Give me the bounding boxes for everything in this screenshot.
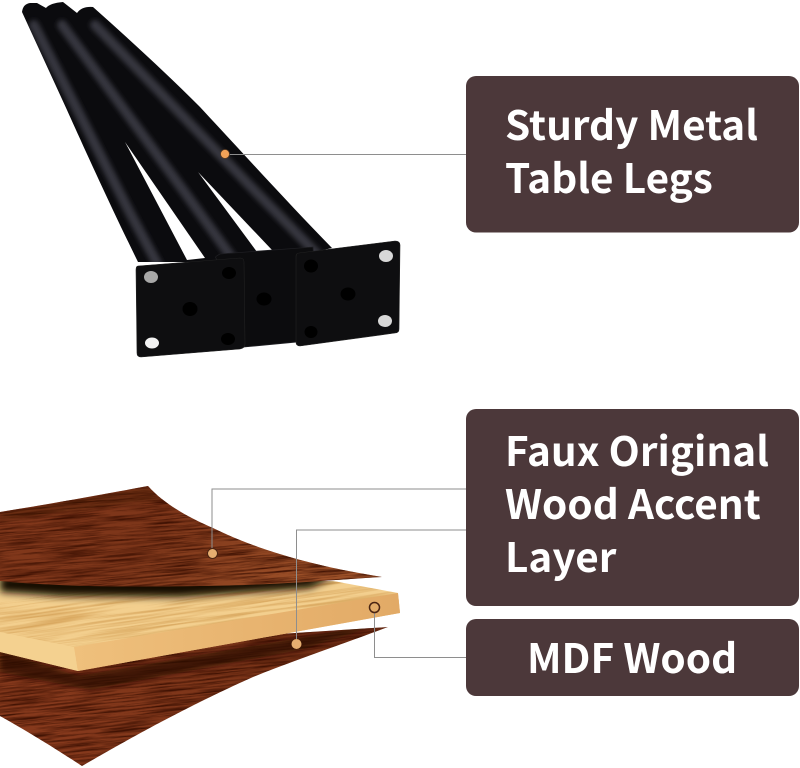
- legs: three tapered black tubes: [22, 2, 332, 265]
- mounting plate: left: [136, 258, 245, 357]
- light MDF board: [0, 581, 400, 671]
- label panel: sturdy metal table legs: [466, 76, 799, 232]
- bottom veneer layer: [0, 627, 388, 766]
- photo: layered wood board: [0, 486, 400, 766]
- label text: Faux Original: [505, 419, 769, 478]
- label panel: faux original wood accent layer: [466, 409, 799, 606]
- label text: Sturdy Metal: [505, 93, 758, 152]
- top veneer layer: [0, 486, 382, 586]
- leader line and dot: accent layer (upper): [208, 489, 466, 558]
- label text: MDF Wood: [527, 626, 737, 685]
- leader line and dot: accent layer (lower): [292, 530, 466, 649]
- mounting plate: middle: [216, 247, 318, 347]
- label text: Wood Accent: [505, 472, 761, 531]
- photo: black metal table legs: [22, 2, 400, 357]
- mounting plate: right: [296, 241, 400, 346]
- leader line and dot: metal legs: [220, 150, 466, 158]
- label panel: MDF wood: [466, 619, 799, 696]
- label text: Table Legs: [505, 146, 713, 205]
- label text: Layer: [505, 525, 617, 584]
- leader line and ring: MDF: [370, 602, 466, 658]
